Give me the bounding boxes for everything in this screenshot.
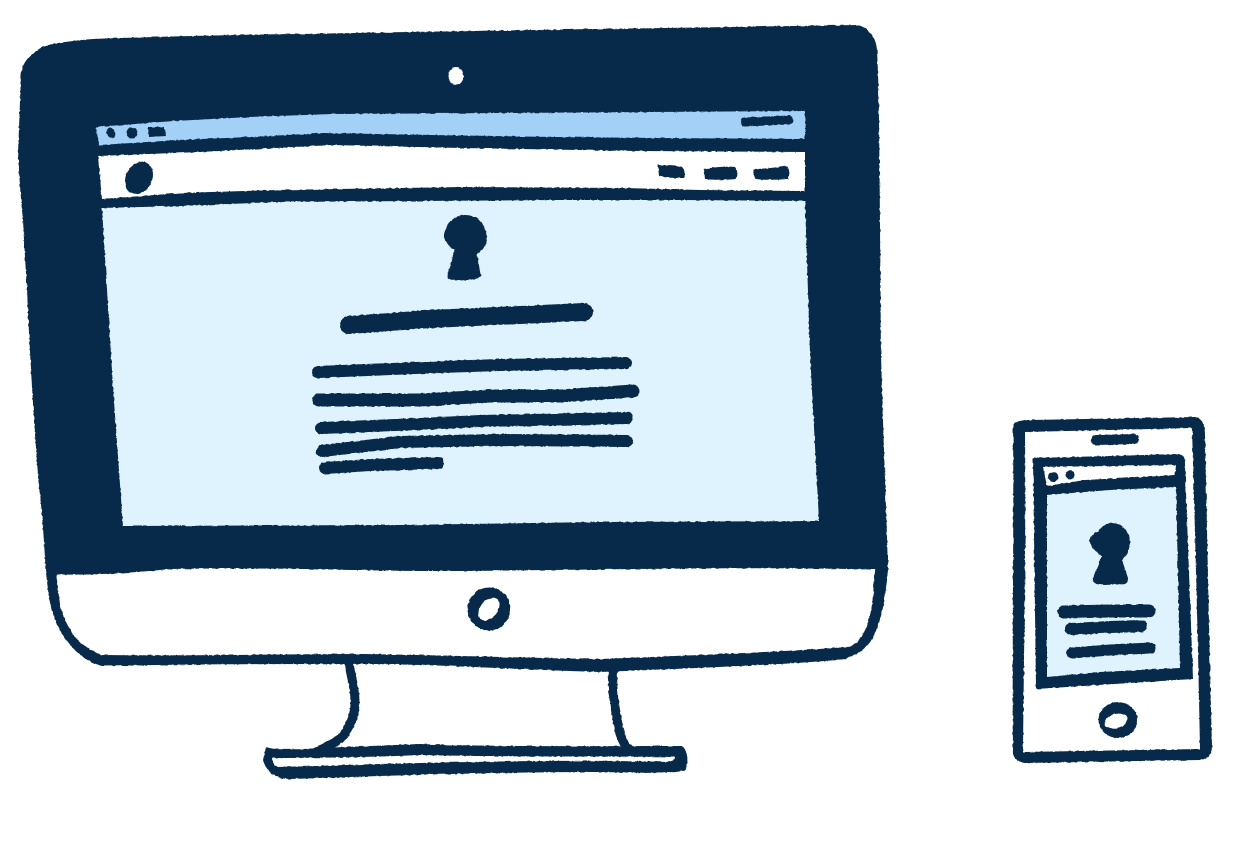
stand base <box>263 744 687 779</box>
window control dots <box>105 126 166 140</box>
icon: smartphone <box>1013 417 1212 763</box>
text lines <box>1064 611 1150 653</box>
keyhole icon <box>444 215 487 280</box>
speaker <box>1096 439 1134 440</box>
monitor bezel <box>18 25 888 575</box>
body text lines <box>318 363 633 468</box>
headline bar <box>349 312 584 325</box>
phone body <box>1013 417 1212 763</box>
icon: desktop monitor <box>18 25 888 779</box>
phone page area <box>1047 487 1180 677</box>
browser nav bar <box>98 145 805 199</box>
logo <box>120 157 158 199</box>
phone home button <box>1098 702 1138 738</box>
browser page area <box>102 200 819 526</box>
browser title bar <box>96 111 805 145</box>
keyhole icon <box>1089 523 1130 585</box>
phone address bar <box>1043 465 1176 486</box>
nav items <box>658 165 789 180</box>
window label pill <box>745 120 789 122</box>
camera <box>448 67 464 85</box>
monitor chin <box>45 555 888 672</box>
phone screen frame <box>1033 454 1193 689</box>
home button <box>461 581 517 637</box>
monitor stand <box>263 664 687 779</box>
